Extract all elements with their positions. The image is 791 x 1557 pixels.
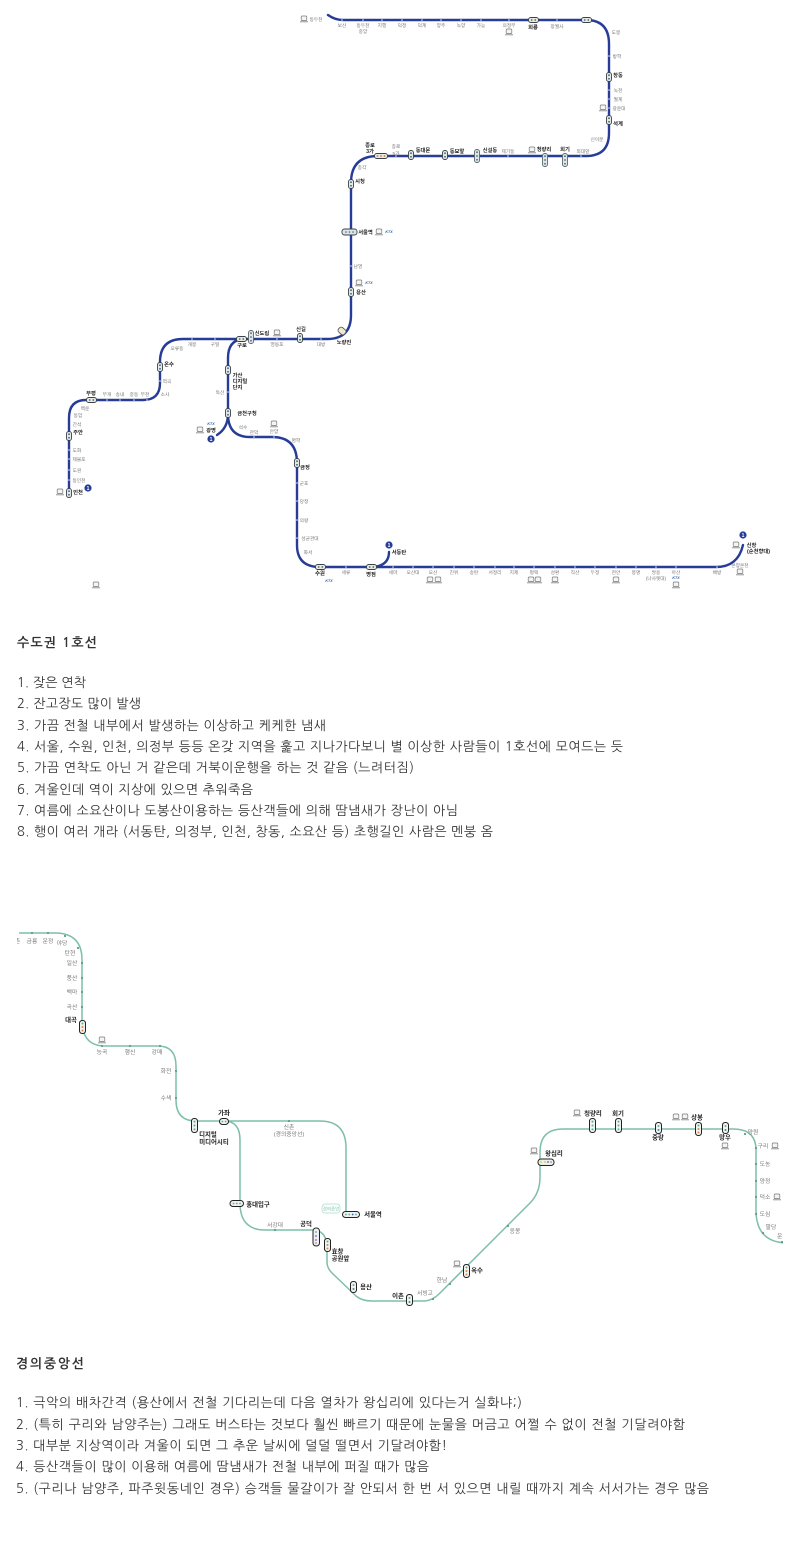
regular station labels on Line 1: 종각: [358, 164, 367, 171]
regular station labels on Line 1: 중앙: [359, 28, 368, 34]
text block: Line 1 complaints: 8. 행이 여러 개라 (서동탄, 의정부, 인천, 창동, 소요산 등) 초행길인 사람은 멘붕 옴: [17, 825, 493, 838]
station dots on Gyeongui-Jungang: [31, 932, 783, 1300]
regular station labels on Line 1: 가능: [477, 22, 486, 29]
interchange station markers on Line 1: [66, 18, 612, 570]
regular station labels on Line 1: 구일: [211, 341, 219, 348]
terminal number badges: 1: [388, 543, 391, 549]
regular station labels on Line 1: 안양: [270, 428, 279, 434]
transfer station labels on Line 1: [73, 23, 770, 578]
transfer station labels on Gyeongui-Jungang: 미디어시티: [199, 1137, 229, 1146]
regular station labels on Line 1: 대방: [317, 341, 326, 348]
transfer station labels on Gyeongui-Jungang: 공원앞: [332, 1254, 349, 1262]
regular station labels on Gyeongui-Jungang: 야당: [57, 939, 68, 947]
icons: transfer and train symbols: [56, 16, 744, 588]
regular station labels on Line 1: 천안: [612, 569, 621, 575]
text block: Line 1 complaints: 7. 여름에 소요산이나 도봉산이용하는 등산객들에 의해 땀냄새가 장난이 아님: [17, 804, 458, 817]
regular station labels on Line 1: 도원: [73, 467, 81, 473]
regular station labels on Line 1: 독산: [216, 389, 225, 396]
subway map: Gyeongui-Jungang Line: [10, 932, 791, 1306]
transfer station labels on Line 1: 신도림: [255, 329, 269, 337]
regular station labels on Line 1: 의정부: [503, 22, 516, 29]
regular station labels on Line 1: 백운: [81, 405, 90, 412]
transfer station labels on Line 1: 신길: [296, 325, 306, 333]
regular station labels on Line 1: 도봉: [612, 30, 621, 35]
terminal number badges: 1: [742, 533, 745, 539]
regular station labels on Line 1: 도화: [73, 448, 82, 454]
regular station labels on Line 1: 소사: [161, 391, 170, 398]
transfer station labels on Line 1: 청량리: [537, 145, 551, 153]
subway map: Seoul Metropolitan Line 1: [56, 15, 770, 588]
Gyeongui-Jungang line badge: [322, 1204, 340, 1213]
regular station labels on Line 1: 봉명: [632, 569, 640, 575]
regular station labels on Line 1: 남영: [354, 263, 362, 269]
transfer station labels on Line 1: 디지털: [233, 377, 247, 385]
regular station labels on Gyeongui-Jungang: 백마: [67, 988, 78, 996]
regular station labels on Gyeongui-Jungang: 금촌: [10, 937, 21, 945]
text block: Line 1 complaints: 6. 겨울인데 역이 지상에 있으면 추워죽음: [17, 783, 253, 796]
KTX logos: KTX: [207, 422, 215, 426]
transfer station labels on Line 1: 주안: [73, 428, 83, 436]
regular station labels on Gyeongui-Jungang: 덕소: [760, 1194, 771, 1201]
Gyeongui-Jungang line badge: 경의중앙: [323, 1206, 339, 1212]
regular station labels on Line 1: 오산: [429, 569, 438, 575]
regular station labels on Line 1: 개봉: [188, 341, 197, 348]
regular station labels on Gyeongui-Jungang: 강매: [152, 1048, 162, 1056]
regular station labels on Line 1: 명학: [292, 437, 301, 444]
transfer station labels on Line 1: 종로: [365, 142, 375, 149]
transfer station labels on Line 1: 서동탄: [392, 548, 406, 556]
regular station labels on Line 1: 동암: [74, 412, 83, 418]
transfer station labels on Line 1: 신창: [747, 541, 756, 549]
KTX logos: KTX: [365, 281, 373, 285]
regular station labels on Gyeongui-Jungang: 능곡: [97, 1049, 108, 1056]
text block: Line 1 complaints: [17, 676, 623, 838]
regular station labels on Line 1: 송내: [116, 391, 124, 398]
regular station labels on Line 1: 송탄: [470, 569, 479, 575]
regular station labels on Line 1: 의왕: [300, 517, 309, 524]
regular station labels on Line 1: 덕정: [398, 22, 406, 29]
heading: Line 1: 수도권 1호선: [17, 636, 97, 649]
regular station labels on Line 1: 부천: [141, 391, 149, 398]
regular station labels on Gyeongui-Jungang: 서강대: [267, 1221, 283, 1229]
text block: Gyeongui-Jungang complaints: 5. (구리나 남양주, 파주윗동네인 경우) 승객들 물갈이가 잘 안되서 한 번 서 있으면 내릴 때까지 계속 서서가는 경우 많음: [16, 1482, 709, 1495]
regular station labels on Line 1: 중동: [130, 392, 139, 397]
regular station labels on Line 1: 배방: [713, 569, 722, 576]
transfer station labels on Line 1: 부평: [86, 389, 96, 397]
transfer station labels on Line 1: 시청: [355, 177, 365, 185]
regular station labels on Line 1: 지행: [378, 22, 386, 29]
regular station labels on Line 1: 동두천: [310, 16, 322, 23]
transfer station labels on Line 1: 서울역: [358, 228, 373, 236]
transfer station labels on Gyeongui-Jungang: 왕십리: [545, 1148, 563, 1158]
transfer station labels on Gyeongui-Jungang: 서울역: [364, 1210, 382, 1218]
regular station labels on Gyeongui-Jungang: 서빙고: [417, 1289, 434, 1297]
regular station labels on Line 1: 온양온천: [731, 562, 749, 568]
regular station labels on Line 1: 보산: [338, 22, 347, 28]
regular station labels on Line 1: 오산대: [407, 569, 419, 576]
transfer station labels on Line 1: 노량진: [337, 338, 351, 346]
regular station labels on Gyeongui-Jungang: 팔당: [766, 1223, 777, 1231]
regular station labels on Line 1: 종로: [392, 144, 401, 149]
text block: Line 1 complaints: 4. 서울, 수원, 인천, 의정부 등등 온갖 지역을 훑고 지나가다보니 별 이상한 사람들이 1호선에 모여드는 듯: [17, 740, 623, 753]
transfer station labels on Line 1: (순천향대): [747, 547, 770, 555]
terminal number badges: 1: [87, 486, 90, 492]
regular station labels on Gyeongui-Jungang: 곡산: [67, 1003, 78, 1011]
regular station labels on Line 1: 덕계: [418, 22, 426, 29]
regular station labels on Gyeongui-Jungang: 화전: [161, 1067, 171, 1075]
transfer station labels on Line 1: 광명: [206, 426, 216, 434]
regular station labels on Line 1: 서정리: [489, 569, 501, 576]
regular station labels on Gyeongui-Jungang: 신촌: [284, 1123, 295, 1131]
text block: Gyeongui-Jungang complaints: 1. 극악의 배차간격 (용산에서 전철 기다리는데 다음 열차가 왕십리에 있다는거 실화냐;): [16, 1396, 522, 1409]
regular station labels on Line 1: 세마: [389, 569, 398, 576]
transfer station labels on Line 1: 동묘앞: [450, 147, 464, 155]
transfer station labels on Gyeongui-Jungang: 회기: [612, 1108, 624, 1118]
station dots on Line 1: [68, 19, 718, 568]
regular station labels on Gyeongui-Jungang: 수색: [161, 1094, 171, 1102]
text block: Gyeongui-Jungang complaints: 3. 대부분 지상역이라 겨울이 되면 그 추운 날씨에 덜덜 떨면서 기달려야함!: [16, 1439, 447, 1452]
transfer station labels on Line 1: 온수: [164, 361, 174, 368]
regular station labels on Line 1: 성균관대: [301, 535, 319, 542]
route line: Gyeongui-Jungang: [19, 933, 786, 1301]
regular station labels on Line 1: 간석: [73, 421, 81, 428]
regular station labels on Gyeongui-Jungang: 운정: [43, 938, 53, 945]
transfer station labels on Line 1: 수원: [315, 569, 325, 577]
regular station labels on Gyeongui-Jungang: 한남: [437, 1276, 448, 1284]
transfer station labels on Line 1: 창동: [613, 71, 623, 79]
transfer station labels on Line 1: 금정: [300, 463, 310, 471]
transfer station labels on Gyeongui-Jungang: 청량리: [584, 1108, 602, 1118]
regular station labels on Gyeongui-Jungang: 양원: [748, 1128, 758, 1136]
terminal number badges: 1: [210, 437, 213, 443]
text block: Line 1 complaints: 2. 잔고장도 많이 발생: [17, 697, 141, 710]
regular station labels on Line 1: 망월사: [551, 23, 564, 30]
KTX logos: KTX: [672, 576, 680, 580]
transfer station labels on Line 1: 동대문: [416, 146, 430, 154]
transfer station labels on Line 1: 구로: [237, 342, 247, 349]
text block: Line 1 complaints: 5. 가끔 연착도 아닌 거 같은데 거북이운행을 하는 것 같음 (느려터짐): [17, 761, 414, 774]
regular station labels on Gyeongui-Jungang: (경의중앙선): [274, 1130, 304, 1138]
regular station labels on Gyeongui-Jungang: 구리: [758, 1142, 768, 1150]
transfer station labels on Gyeongui-Jungang: 공덕: [300, 1219, 312, 1228]
regular station labels on Gyeongui-Jungang: 탄현: [65, 949, 75, 957]
text block: Gyeongui-Jungang complaints: 2. (특히 구리와 남양주는) 그래도 버스타는 것보다 훨씬 빠르기 때문에 눈물을 머금고 어쩔 수 없이 전철 기달려야함: [16, 1418, 685, 1431]
transfer station labels on Gyeongui-Jungang: 옥수: [471, 1266, 483, 1274]
regular station labels on Line 1: 쌍용: [652, 569, 661, 575]
icons: transfer symbols on Gyeongui-Jungang: [98, 1037, 781, 1267]
regular station labels on Line 1: 직산: [571, 569, 580, 576]
interchange station markers on Gyeongui-Jungang: [80, 1020, 728, 1306]
transfer station labels on Line 1: 단지: [233, 383, 242, 391]
transfer station labels on Line 1: 병점: [366, 570, 376, 578]
terminal number badges: [84, 435, 747, 549]
regular station labels on Line 1: (나사렛대): [646, 575, 667, 582]
transfer station labels on Line 1: 금천구청: [237, 409, 257, 417]
regular station labels on Line 1: 제기동: [502, 148, 515, 155]
transfer station labels on Line 1: 회룡: [528, 23, 538, 31]
text block: Line 1 complaints: 3. 가끔 전철 내부에서 발생하는 이상하고 케케한 냄새: [17, 719, 326, 732]
regular station labels on Line 1: 제물포: [73, 456, 86, 463]
regular station labels on Line 1: 5가: [393, 150, 400, 157]
text block: Line 1 complaints: 1. 잦은 연착: [17, 676, 86, 689]
transfer station labels on Gyeongui-Jungang: 가좌: [218, 1108, 230, 1117]
regular station labels on Line 1: 두정: [591, 569, 599, 576]
heading: Gyeongui-Jungang: 경의중앙선: [16, 1356, 84, 1370]
regular station labels on Line 1: 월계: [614, 96, 622, 103]
regular station labels on Line 1: 군포: [300, 481, 309, 486]
regular station labels on Gyeongui-Jungang: [10, 937, 791, 1297]
regular station labels on Line 1: 양주: [437, 22, 446, 29]
text block: Gyeongui-Jungang complaints: [16, 1396, 709, 1495]
regular station labels on Line 1: 역곡: [163, 378, 172, 385]
regular station labels on Line 1: 지제: [510, 569, 518, 576]
transfer station labels on Gyeongui-Jungang: 대곡: [65, 1015, 77, 1024]
transfer station labels on Line 1: 용산: [356, 288, 366, 296]
regular station labels on Gyeongui-Jungang: 행신: [125, 1048, 135, 1056]
regular station labels on Line 1: 화서: [304, 549, 312, 556]
regular station labels on Line 1: 녹천: [614, 87, 622, 94]
regular station labels on Gyeongui-Jungang: 양정: [760, 1177, 770, 1185]
regular station labels on Gyeongui-Jungang: 도농: [760, 1161, 771, 1168]
text block: Gyeongui-Jungang complaints: 4. 등산객들이 많이 이용해 여름에 땀냄새가 전철 내부에 퍼질 때가 많음: [16, 1460, 429, 1473]
regular station labels on Line 1: 오류동: [171, 346, 184, 352]
regular station labels on Line 1: 평택: [530, 569, 538, 576]
transfer station labels on Gyeongui-Jungang: 상봉: [691, 1112, 703, 1122]
regular station labels on Line 1: 방학: [613, 53, 622, 60]
regular station labels on Line 1: 녹양: [457, 22, 466, 29]
regular station labels on Line 1: 진위: [450, 569, 458, 576]
KTX logos: KTX: [385, 230, 393, 234]
transfer station labels on Gyeongui-Jungang: 용산: [360, 1282, 372, 1291]
regular station labels on Gyeongui-Jungang: 금릉: [27, 938, 38, 945]
transfer station labels on Gyeongui-Jungang: 중랑: [652, 1132, 664, 1142]
transfer station labels on Gyeongui-Jungang: 홍대입구: [246, 1200, 270, 1208]
regular station labels on Gyeongui-Jungang: 응봉: [510, 1228, 521, 1235]
transfer station labels on Gyeongui-Jungang: [65, 1015, 731, 1300]
regular station labels on Line 1: 광운대: [613, 105, 625, 112]
regular station labels on Gyeongui-Jungang: 일산: [67, 959, 78, 967]
transfer station labels on Gyeongui-Jungang: 디지털: [199, 1129, 217, 1138]
regular station labels on Line 1: 석수: [239, 424, 248, 431]
regular station labels on Line 1: 동두천: [357, 22, 369, 29]
transfer station labels on Line 1: 가산: [233, 371, 242, 379]
transfer station labels on Line 1: 신설동: [483, 146, 497, 154]
transfer station labels on Line 1: 석계: [613, 120, 623, 128]
transfer station labels on Line 1: 인천: [73, 488, 83, 496]
regular station labels on Line 1: [73, 16, 749, 582]
regular station labels on Line 1: 당정: [300, 498, 308, 504]
transfer station labels on Gyeongui-Jungang: 망우: [719, 1132, 731, 1142]
regular station labels on Line 1: 성환: [551, 569, 560, 575]
regular station labels on Line 1: 아산: [672, 569, 681, 576]
transfer station labels on Line 1: 회기: [560, 145, 570, 153]
regular station labels on Gyeongui-Jungang: 도심: [760, 1210, 770, 1218]
transfer station labels on Gyeongui-Jungang: 효창: [332, 1246, 343, 1256]
route line: Line 1 main and branches: [69, 15, 743, 567]
KTX logos: [207, 230, 680, 583]
regular station labels on Line 1: 영등포: [271, 341, 284, 347]
regular station labels on Line 1: 동인천: [73, 477, 85, 483]
regular station labels on Line 1: 관악: [250, 429, 259, 436]
transfer station labels on Line 1: 3가: [366, 147, 374, 155]
regular station labels on Line 1: 외대앞: [577, 148, 590, 155]
regular station labels on Line 1: 세류: [342, 569, 351, 576]
regular station labels on Line 1: 부개: [103, 391, 111, 398]
transfer station labels on Gyeongui-Jungang: 이촌: [392, 1291, 404, 1300]
regular station labels on Line 1: 신이문: [591, 136, 604, 143]
regular station labels on Gyeongui-Jungang: 풍산: [67, 974, 78, 982]
KTX logos: KTX: [325, 579, 333, 583]
